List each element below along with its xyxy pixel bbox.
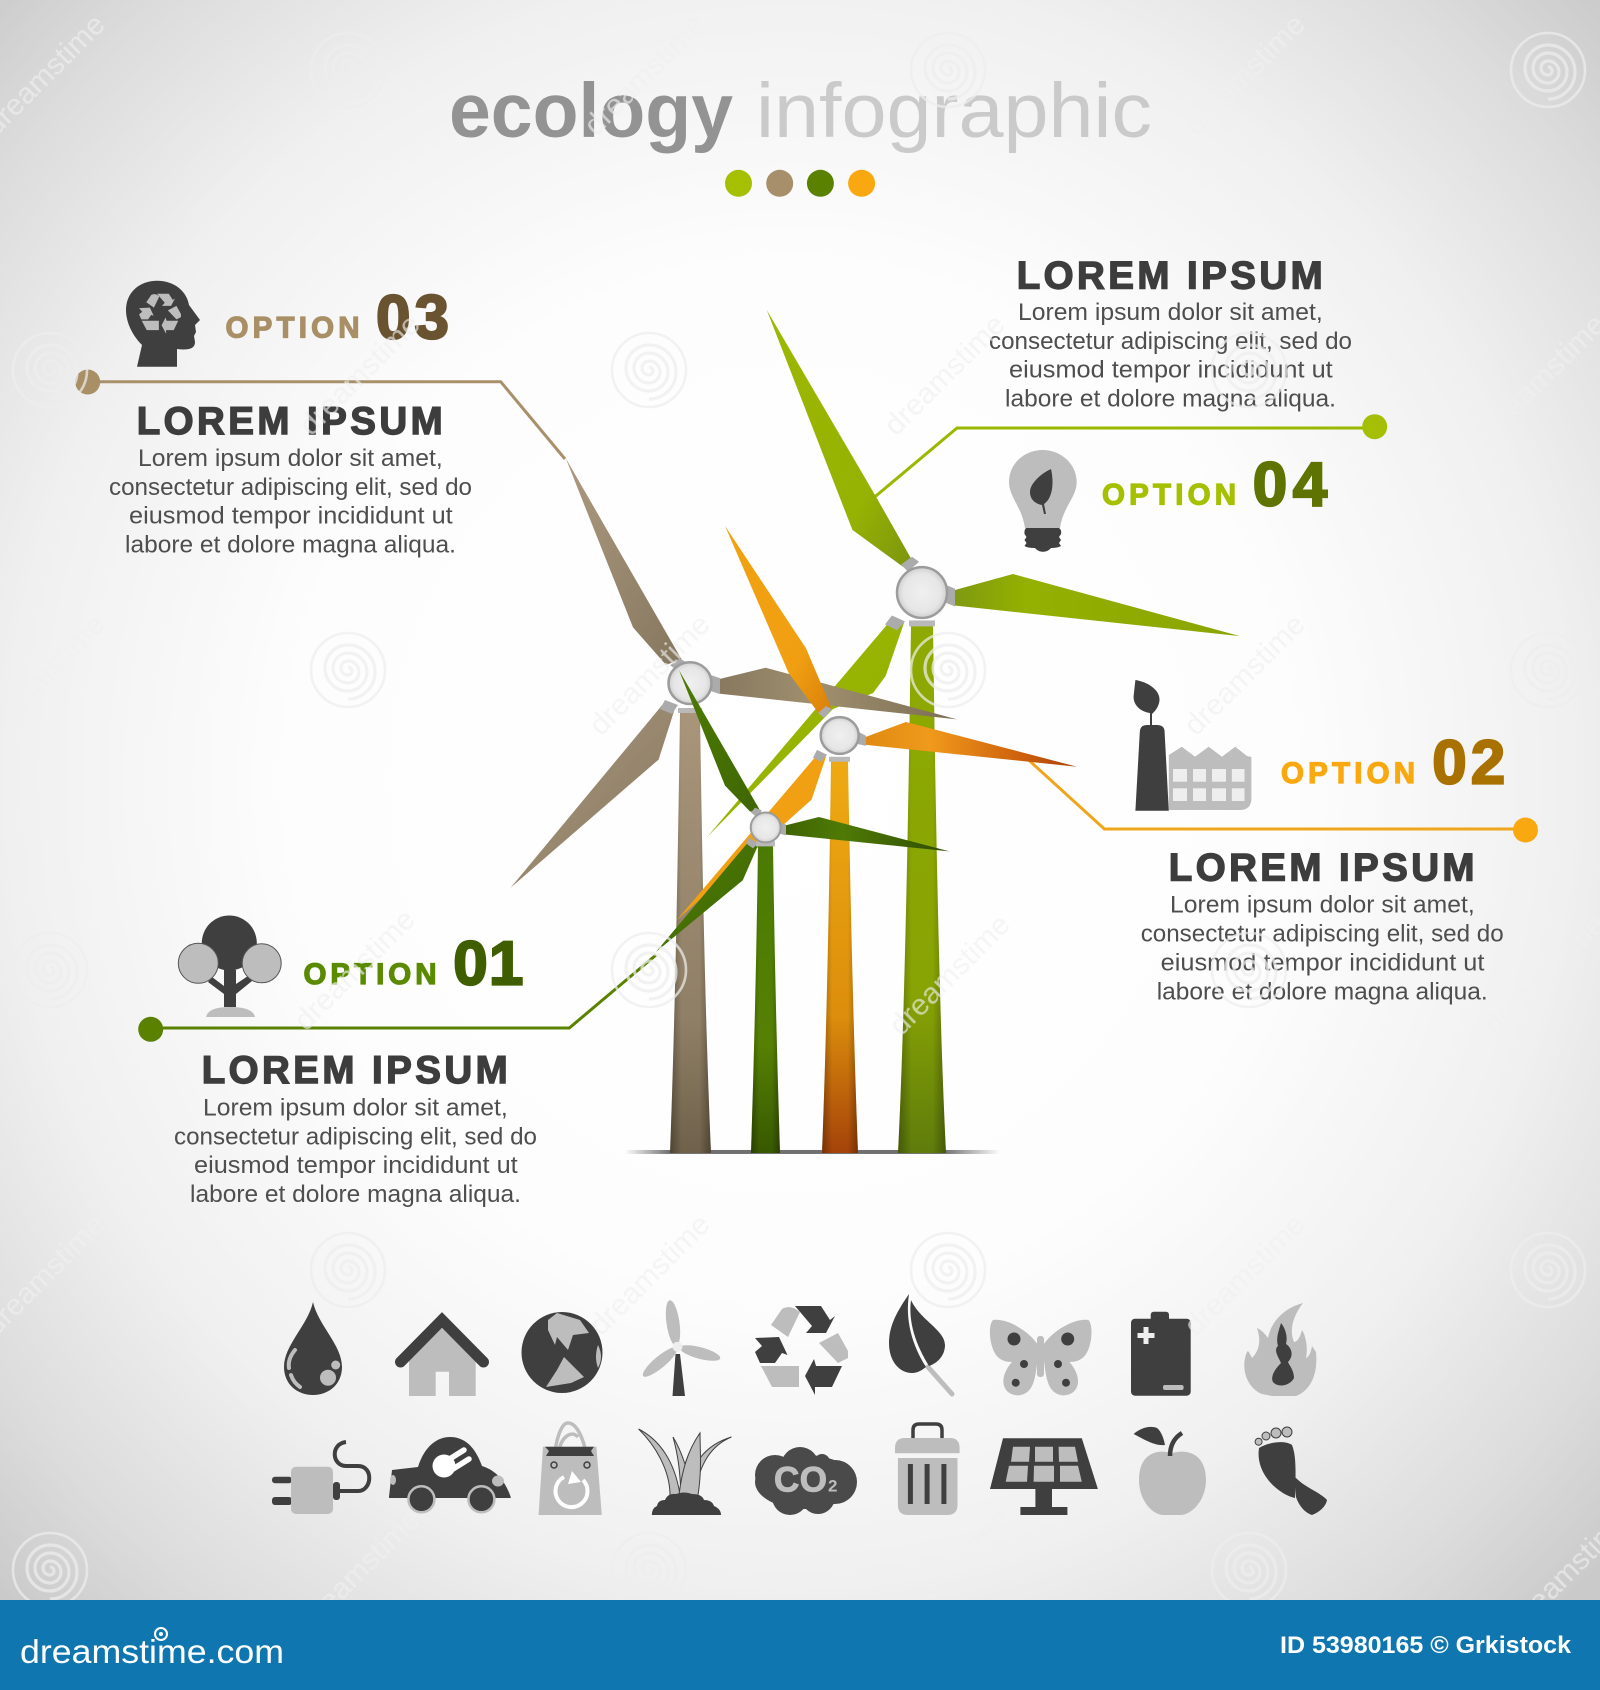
watermark: dreamstime text: dreamstime — [878, 308, 1012, 442]
icon: CO2 cloud: 2 — [828, 1477, 837, 1496]
label: option 01: 01 — [453, 930, 523, 998]
body text: consectetur adipiscing elit, sed do — [989, 328, 1352, 355]
title: ecology — [449, 68, 733, 154]
body text — [174, 1094, 537, 1208]
body text — [989, 299, 1352, 413]
wind turbine: dark green — [656, 670, 949, 1153]
label: option 03 — [226, 284, 449, 352]
watermark: dreamstime text: dreamstime — [1178, 8, 1312, 142]
body text: labore et dolore magna aliqua. — [190, 1181, 521, 1208]
heading: LOREM IPSUM — [137, 400, 443, 443]
watermark: dreamstime text: dreamstime — [1178, 1208, 1312, 1342]
body text — [1141, 892, 1504, 1005]
body text: consectetur adipiscing elit, sed do — [109, 474, 472, 501]
watermark: dreamstime text: dreamstime — [288, 903, 422, 1037]
icon: apple — [1134, 1427, 1206, 1515]
icon: leaf — [889, 1294, 952, 1394]
body text: eiusmod tempor incididunt ut — [129, 503, 453, 530]
title colour dots — [725, 170, 875, 197]
icon: water drop — [284, 1302, 342, 1395]
icon: electric car — [389, 1437, 511, 1512]
connector: option 1 — [138, 955, 656, 1042]
watermark: dreamstime text: dreamstime — [293, 308, 427, 442]
label: option 02 — [1281, 728, 1505, 798]
label: option 04: 04 — [1253, 450, 1328, 520]
ground shadow — [625, 1150, 1000, 1154]
label: option 01: OPTION — [304, 958, 436, 991]
body text: consectetur adipiscing elit, sed do — [174, 1123, 537, 1150]
watermark: dreamstime text: dreamstime — [293, 1503, 427, 1637]
icon: tree — [178, 916, 281, 1017]
icon: head with recycle symbol — [126, 281, 200, 367]
label: option 03: 03 — [376, 284, 449, 352]
panel: option 3 — [109, 281, 472, 559]
watermark: dreamstime text: dreamstime — [583, 608, 717, 742]
label: option 01 — [304, 930, 523, 998]
panel: option 4 — [989, 254, 1352, 552]
watermark: dreamstime text: dreamstime — [583, 1208, 717, 1342]
footer band — [0, 1600, 1600, 1690]
icon: shopping bag — [539, 1423, 602, 1515]
icon: wind turbine — [639, 1299, 722, 1396]
body text: Lorem ipsum dolor sit amet, — [1018, 299, 1323, 326]
icon: grass — [639, 1429, 731, 1515]
icon: recycle — [755, 1306, 848, 1395]
watermark: dreamstime text: dreamstime — [883, 908, 1017, 1042]
icon: CO2 cloud — [755, 1447, 857, 1515]
heading: LOREM IPSUM — [202, 1049, 508, 1092]
body text: labore et dolore magna aliqua. — [1157, 978, 1488, 1005]
icon: footprint — [1255, 1427, 1327, 1515]
icon: butterfly — [990, 1320, 1092, 1395]
body text: Lorem ipsum dolor sit amet, — [203, 1094, 508, 1121]
footer logo: dreamstime.com — [20, 1633, 284, 1670]
title: infographic — [756, 68, 1152, 154]
body text: Lorem ipsum dolor sit amet, — [1170, 892, 1475, 919]
icon: trash can — [895, 1424, 960, 1515]
icon: CO2 cloud: CO — [774, 1461, 827, 1500]
body text: Lorem ipsum dolor sit amet, — [138, 445, 443, 472]
body text: eiusmod tempor incididunt ut — [1009, 357, 1333, 384]
body text: consectetur adipiscing elit, sed do — [1141, 921, 1504, 948]
footer image id: ID 53980165 © Grkistock — [1280, 1632, 1572, 1659]
heading: LOREM IPSUM — [1017, 254, 1323, 297]
icon: factory with leaf — [1134, 680, 1251, 811]
wind turbine: brown — [511, 458, 957, 1153]
body text: labore et dolore magna aliqua. — [125, 532, 456, 559]
icon: solar panel — [990, 1438, 1098, 1515]
icon: house — [400, 1320, 484, 1396]
label: option 02: 02 — [1432, 728, 1505, 798]
wind turbines — [511, 310, 1240, 1154]
body text: eiusmod tempor incididunt ut — [1161, 949, 1485, 976]
body text — [109, 445, 472, 559]
wind turbine: lime — [707, 310, 1240, 1153]
connector: option 4 — [875, 414, 1387, 496]
connector: option 2 — [1025, 757, 1538, 842]
watermark: dreamstime text: dreamstime — [1178, 608, 1312, 742]
heading: LOREM IPSUM — [1169, 847, 1474, 890]
watermark: dreamstime text: dreamstime — [578, 8, 712, 142]
connector: option 3 — [75, 370, 565, 459]
label: option 03: OPTION — [226, 311, 360, 344]
watermark: dreamstime text: dreamstime — [883, 1503, 1017, 1637]
icon: earth globe — [522, 1312, 602, 1393]
panel: option 2 — [1134, 680, 1505, 1005]
label: option 04 — [1102, 450, 1328, 520]
label: option 04: OPTION — [1102, 479, 1236, 512]
title — [449, 68, 1152, 154]
icon: battery — [1131, 1312, 1191, 1396]
body text: eiusmod tempor incididunt ut — [194, 1152, 518, 1179]
label: option 02: OPTION — [1281, 757, 1415, 790]
panel: option 1 — [174, 916, 537, 1208]
icon: light bulb with leaf — [1009, 450, 1077, 552]
icon: power plug — [272, 1442, 369, 1514]
body text: labore et dolore magna aliqua. — [1005, 386, 1336, 413]
icon: flame — [1244, 1303, 1316, 1396]
wind turbine: orange — [676, 526, 1077, 1153]
